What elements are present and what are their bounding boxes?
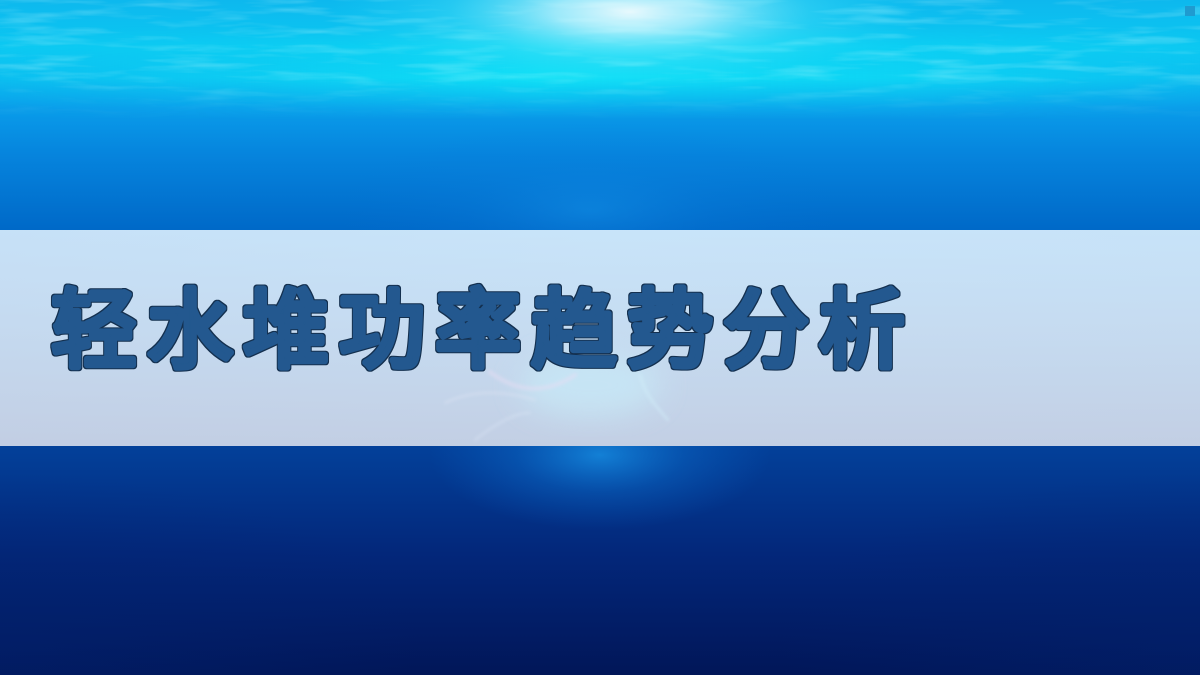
jellyfish silhouette [445,353,668,440]
small square marker [1185,6,1195,16]
title: 轻水堆功率趋势分析 [51,283,915,379]
translucent title band [0,230,1200,446]
